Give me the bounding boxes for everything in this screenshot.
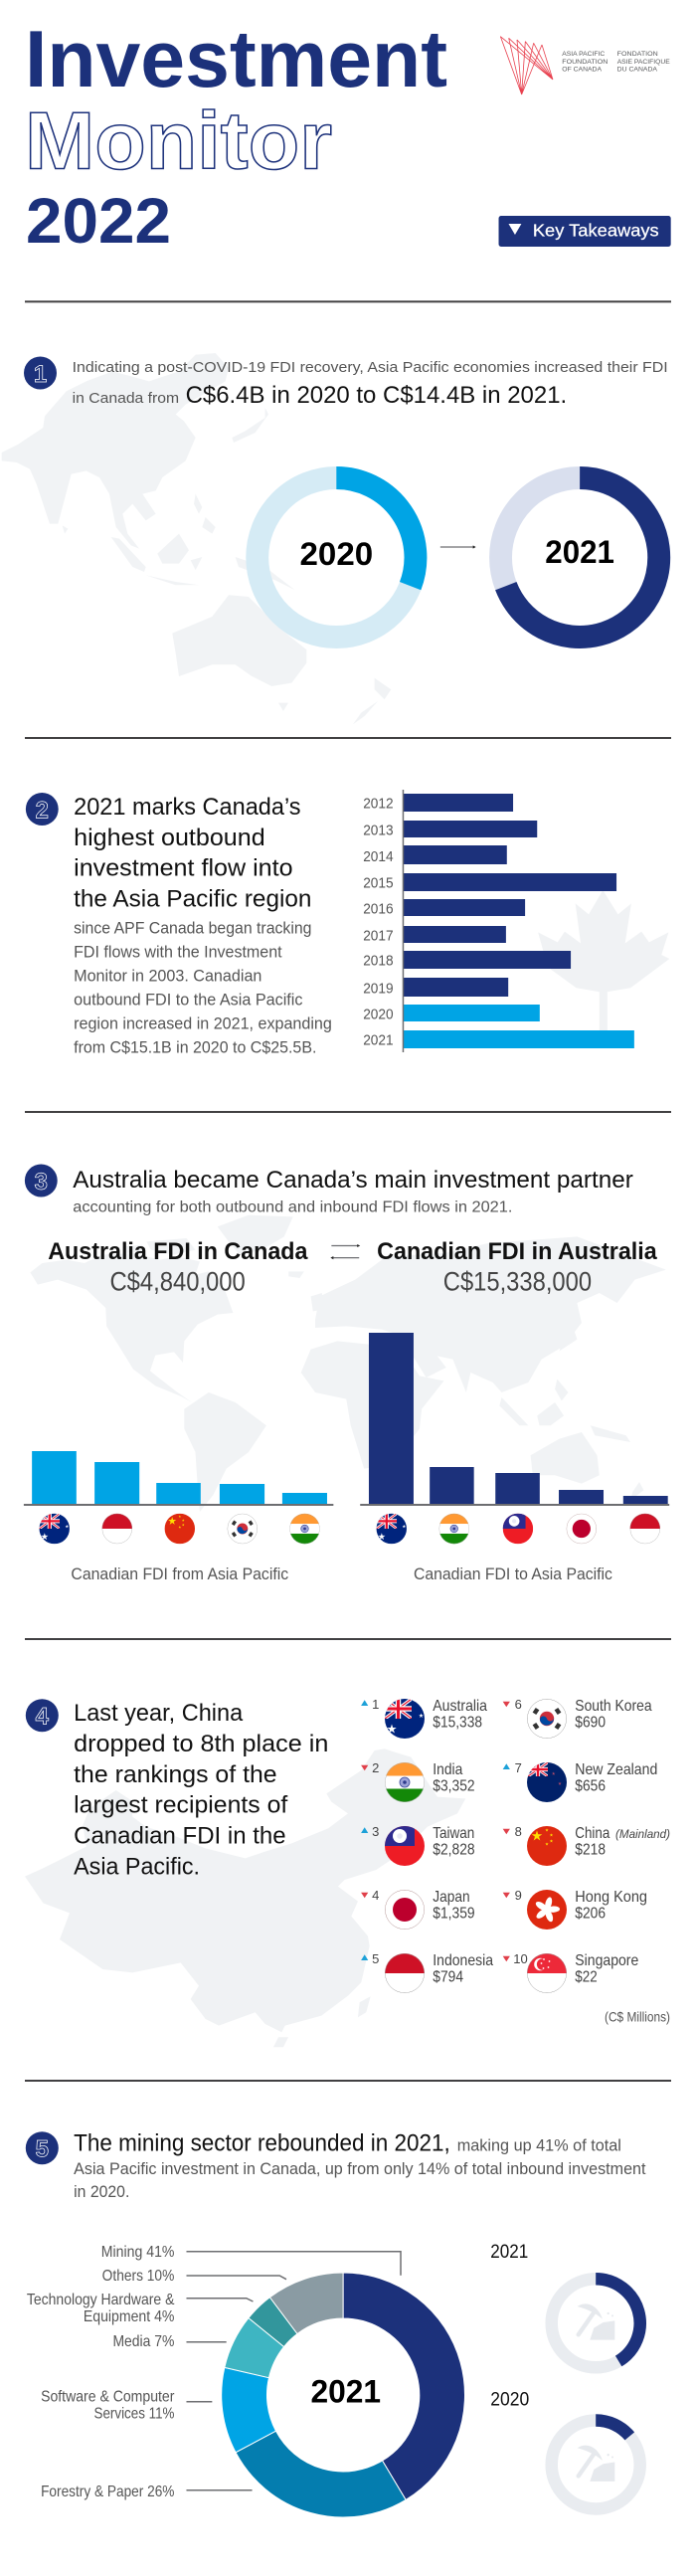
donut chart: 2021 sectors: 2021 bbox=[310, 2373, 381, 2410]
rank 6 South Korea bbox=[503, 1697, 652, 1739]
section 5 text: Asia Pacific investment in Canada, up from only 14% of total inbound investment bbox=[74, 2160, 646, 2178]
bar chart: outbound FDI by year: 2021 bbox=[363, 1032, 394, 1049]
rank 3 Taiwan: $2,828 bbox=[433, 1842, 475, 1859]
bar chart: outbound FDI by year: 2015 bbox=[363, 874, 394, 891]
small donut: mining share 2021 bbox=[552, 2279, 640, 2367]
rank 10 Singapore: Singapore bbox=[575, 1952, 638, 1969]
rank 7 New Zealand: 7 bbox=[515, 1760, 522, 1775]
bar chart: FDI to Asia Pacific bbox=[360, 1333, 669, 1583]
heading: Australia FDI in Canada: Australia FDI in Canada bbox=[48, 1238, 308, 1265]
section 3 heading bbox=[73, 1167, 633, 1216]
panel: section 5 bbox=[26, 2130, 646, 2517]
donut labels and leader lines: Technology Hardware & bbox=[27, 2292, 175, 2308]
section 2 heading: the Asia Pacific region bbox=[74, 886, 311, 913]
heading: Canadian FDI in Australia: Canadian FDI in Australia bbox=[377, 1238, 657, 1265]
bar chart: outbound FDI by year: 2018 bbox=[363, 953, 394, 970]
rank 10 Singapore: $22 bbox=[575, 1969, 598, 1986]
rank 3 Taiwan: 3 bbox=[372, 1824, 379, 1839]
button: Key Takeaways bbox=[499, 216, 671, 247]
logo: Asia Pacific Foundation of Canada: FOUNDATION bbox=[562, 59, 608, 66]
rank 4 Japan: 4 bbox=[372, 1888, 379, 1903]
donut chart: 2021: 2021 bbox=[545, 534, 614, 570]
bar chart: outbound FDI by year bbox=[363, 790, 634, 1052]
section 1 text bbox=[73, 359, 668, 409]
rank 8 China: $218 bbox=[575, 1842, 606, 1859]
number badge 2 bbox=[26, 793, 59, 826]
background map: Asia Pacific bbox=[2, 353, 391, 724]
bar chart: outbound FDI by year: 2020 bbox=[363, 1006, 394, 1022]
section 2 body text: outbound FDI to the Asia Pacific bbox=[74, 990, 303, 1009]
rank 7 New Zealand: $656 bbox=[575, 1778, 606, 1795]
rank 7 New Zealand bbox=[503, 1760, 657, 1802]
section 2 body text: region increased in 2021, expanding bbox=[74, 1013, 332, 1032]
label: 2020: 2020 bbox=[490, 2390, 529, 2411]
title: Monitor bbox=[25, 95, 332, 187]
section 3 heading: accounting for both outbound and inbound FDI flows in 2021. bbox=[73, 1199, 512, 1216]
bar chart: FDI from Asia Pacific bbox=[24, 1451, 333, 1583]
rank 8 China: (Mainland) bbox=[615, 1827, 670, 1841]
bar chart: outbound FDI by year: 2012 bbox=[363, 796, 394, 813]
number badge 2: 2 bbox=[36, 797, 49, 825]
icon: exchange arrows bbox=[330, 1244, 360, 1259]
section 4 heading: dropped to 8th place in bbox=[74, 1731, 328, 1757]
donut labels and leader lines: Services 11% bbox=[94, 2405, 174, 2422]
donut labels and leader lines: Forestry & Paper 26% bbox=[41, 2484, 174, 2500]
section 2 body text: from C$15.1B in 2020 to C$25.5B. bbox=[74, 1037, 316, 1056]
section 1 text: Indicating a post-COVID-19 FDI recovery, Asia Pacific economies increased their FDI bbox=[73, 359, 668, 376]
panel: section 4 bbox=[25, 1697, 670, 2047]
number badge 4 bbox=[26, 1699, 59, 1732]
section 2 body text: since APF Canada began tracking bbox=[74, 918, 311, 937]
logo: Asia Pacific Foundation of Canada: OF CANADA bbox=[562, 67, 602, 74]
small donut: mining share 2020 bbox=[552, 2421, 640, 2508]
rank 5 Indonesia: 5 bbox=[372, 1951, 379, 1966]
heading: Canadian FDI in Australia bbox=[377, 1238, 657, 1297]
number badge 5: 5 bbox=[36, 2136, 49, 2163]
panel: section 3 bbox=[24, 1164, 669, 1583]
panel: section 1 bbox=[2, 353, 668, 724]
background map: China bbox=[25, 1748, 465, 2047]
ranking: top 10 recipients bbox=[361, 1697, 670, 1993]
rank 8 China bbox=[503, 1824, 670, 1866]
section 5 text: in 2020. bbox=[74, 2183, 129, 2201]
rank 4 Japan: $1,359 bbox=[433, 1906, 475, 1923]
donut labels and leader lines bbox=[27, 2244, 401, 2500]
section 4 heading bbox=[74, 1700, 328, 1881]
panel: section 2 bbox=[26, 790, 669, 1056]
logo: Asia Pacific Foundation of Canada: FONDATION bbox=[617, 51, 658, 58]
bar chart: outbound FDI by year: 2016 bbox=[363, 900, 394, 917]
section 5 text: making up 41% of total bbox=[457, 2137, 621, 2155]
background icon: maple leaf bbox=[536, 890, 669, 1031]
logo: Asia Pacific Foundation of Canada: ASIA PACIFIC bbox=[562, 51, 605, 58]
section 5 text bbox=[74, 2130, 646, 2201]
donut chart: 2021 sectors bbox=[222, 2273, 464, 2517]
button: Key Takeaways: Key Takeaways bbox=[533, 220, 659, 241]
section 2 heading: highest outbound bbox=[74, 825, 265, 851]
section 4 heading: Last year, China bbox=[74, 1700, 244, 1727]
rank 4 Japan bbox=[361, 1888, 475, 1930]
title: 2022 bbox=[26, 185, 171, 257]
bar chart: FDI to Asia Pacific: Canadian FDI to Asia Pacific bbox=[414, 1564, 612, 1583]
section 4 heading: Canadian FDI in the bbox=[74, 1823, 286, 1850]
rank 10 Singapore bbox=[503, 1951, 638, 1993]
donut chart: 2021 bbox=[501, 477, 659, 637]
donut labels and leader lines: Others 10% bbox=[102, 2268, 174, 2285]
rank 4 Japan: Japan bbox=[433, 1889, 470, 1906]
section 2 heading: investment flow into bbox=[74, 855, 293, 882]
title bbox=[25, 15, 447, 257]
number badge 4: 4 bbox=[36, 1704, 50, 1731]
section 3 heading: Australia became Canada’s main investment partner bbox=[73, 1167, 633, 1194]
section 2 body text: FDI flows with the Investment bbox=[74, 942, 282, 961]
bar chart: outbound FDI by year: 2014 bbox=[363, 848, 394, 865]
arrow bbox=[440, 545, 476, 549]
logo: Asia Pacific Foundation of Canada bbox=[500, 37, 670, 94]
rank 5 Indonesia: Indonesia bbox=[433, 1952, 493, 1969]
background map: world bbox=[30, 1215, 666, 1512]
section 2 heading: 2021 marks Canada’s bbox=[74, 794, 301, 821]
title: Investment bbox=[25, 15, 447, 104]
rank 2 India: India bbox=[433, 1761, 462, 1778]
number badge 1: 1 bbox=[34, 361, 47, 388]
rank 7 New Zealand: New Zealand bbox=[575, 1761, 657, 1778]
section 4 heading: largest recipients of bbox=[74, 1792, 288, 1819]
rank 8 China: 8 bbox=[515, 1824, 522, 1839]
rank 6 South Korea: $690 bbox=[575, 1715, 606, 1732]
donut chart: 2020: 2020 bbox=[300, 536, 373, 572]
number badge 3 bbox=[25, 1164, 58, 1197]
rank 8 China: China bbox=[575, 1825, 609, 1842]
rank 9 Hong Kong: $206 bbox=[575, 1906, 606, 1923]
number badge 5 bbox=[26, 2131, 59, 2164]
heading: Australia FDI in Canada: C$4,840,000 bbox=[109, 1266, 246, 1297]
section 5 text: The mining sector rebounded in 2021, bbox=[74, 2130, 450, 2157]
rank 3 Taiwan: Taiwan bbox=[433, 1825, 474, 1842]
rank 5 Indonesia: $794 bbox=[433, 1969, 463, 1986]
heading: Canadian FDI in Australia: C$15,338,000 bbox=[443, 1266, 592, 1297]
rank 1 Australia: Australia bbox=[433, 1698, 487, 1715]
rank 6 South Korea: 6 bbox=[515, 1697, 522, 1712]
rank 1 Australia: $15,338 bbox=[433, 1715, 482, 1732]
section 4 heading: the rankings of the bbox=[74, 1761, 277, 1788]
section 2 body text: Monitor in 2003. Canadian bbox=[74, 966, 261, 985]
donut labels and leader lines: Mining 41% bbox=[101, 2244, 174, 2261]
label: 2021: 2021 bbox=[490, 2242, 528, 2263]
section 1 text: in Canada from bbox=[73, 390, 179, 407]
rank 9 Hong Kong: Hong Kong bbox=[575, 1889, 647, 1906]
donut labels and leader lines: Equipment 4% bbox=[84, 2308, 174, 2325]
logo: Asia Pacific Foundation of Canada: DU CANADA bbox=[617, 67, 657, 74]
unit note: (C$ Millions) bbox=[605, 2009, 670, 2025]
rank 10 Singapore: 10 bbox=[513, 1951, 528, 1966]
section 4 heading: Asia Pacific. bbox=[74, 1854, 200, 1881]
number badge 1 bbox=[24, 356, 57, 390]
rank 9 Hong Kong: 9 bbox=[515, 1888, 522, 1903]
bar chart: FDI from Asia Pacific: Canadian FDI from Asia Pacific bbox=[71, 1564, 289, 1583]
rank 1 Australia: 1 bbox=[372, 1697, 379, 1712]
section 2 body text bbox=[74, 918, 332, 1056]
rank 9 Hong Kong bbox=[503, 1888, 647, 1930]
bar chart: outbound FDI by year: 2019 bbox=[363, 980, 394, 997]
rank 3 Taiwan bbox=[361, 1824, 475, 1866]
bar chart: outbound FDI by year: 2017 bbox=[363, 927, 394, 944]
rank 5 Indonesia bbox=[361, 1951, 493, 1993]
rank 2 India: 2 bbox=[372, 1760, 379, 1775]
number badge 3: 3 bbox=[35, 1169, 48, 1196]
section 2 heading bbox=[74, 794, 311, 913]
donut labels and leader lines: Software & Computer bbox=[41, 2388, 175, 2405]
donut labels and leader lines: Media 7% bbox=[112, 2333, 174, 2350]
donut chart: 2020 bbox=[258, 477, 416, 637]
rank 1 Australia bbox=[361, 1697, 487, 1739]
rank 2 India: $3,352 bbox=[433, 1778, 475, 1795]
section 1 text: C$6.4B in 2020 to C$14.4B in 2021. bbox=[186, 382, 567, 409]
bar chart: outbound FDI by year: 2013 bbox=[363, 822, 394, 838]
logo: Asia Pacific Foundation of Canada: ASIE PACIFIQUE bbox=[617, 59, 670, 66]
heading: Australia FDI in Canada bbox=[48, 1238, 308, 1297]
rank 6 South Korea: South Korea bbox=[575, 1698, 652, 1715]
rank 2 India bbox=[361, 1760, 475, 1802]
